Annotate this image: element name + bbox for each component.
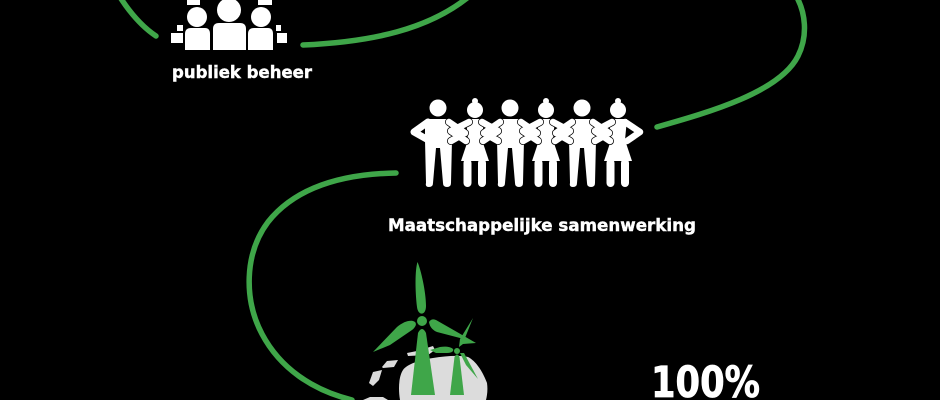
grey island and stones [363, 346, 487, 400]
green path: top centre segment [303, 0, 472, 45]
woman 3 [604, 98, 640, 187]
heading: publiek beheer: publiek beheer [172, 63, 313, 82]
green path: lower left segment [249, 173, 396, 400]
small turbine [430, 318, 478, 395]
woman 1 [461, 98, 489, 187]
large turbine [373, 262, 476, 395]
woman 2 [532, 98, 560, 187]
man 2 [497, 100, 524, 187]
green path: top left segment [118, 0, 156, 36]
icon: public management group [171, 0, 287, 50]
man 1 [414, 100, 452, 187]
man 3 [569, 100, 596, 187]
linked arms [449, 122, 612, 141]
green path: right segment [657, 0, 804, 127]
icon: row of six people [414, 98, 640, 187]
icon: wind turbines on island [363, 262, 487, 400]
heading: Maatschappelijke samenwerking: Maatschappelijke samenwerking [388, 216, 696, 235]
